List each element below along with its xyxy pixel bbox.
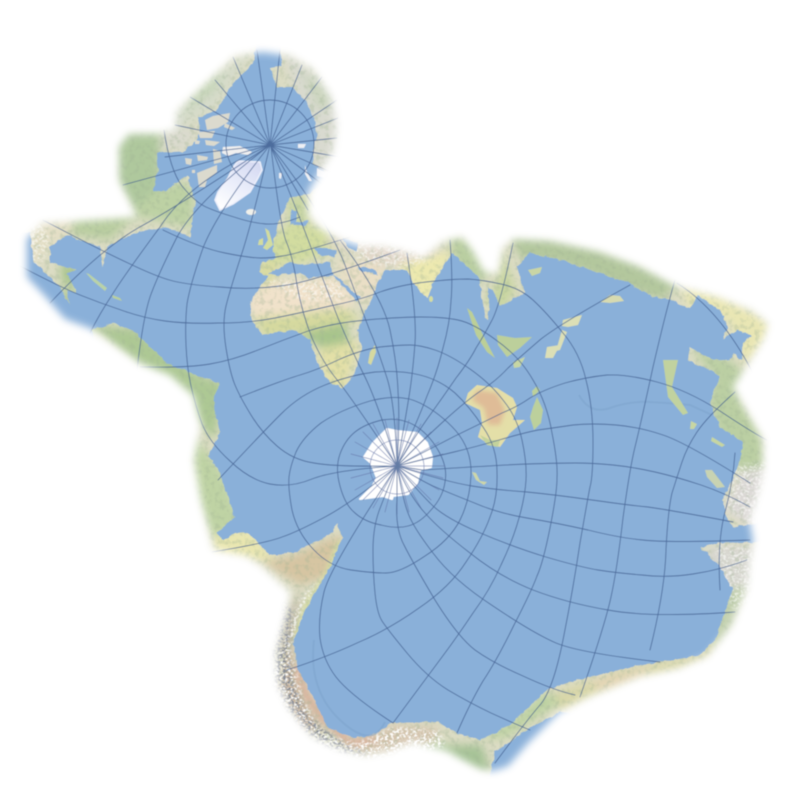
canadian arctic islands <box>185 113 235 187</box>
antarctica <box>360 429 432 499</box>
caribbean islands <box>86 273 107 291</box>
coastal colour bands along the southern mountains <box>297 545 372 743</box>
iceland <box>246 209 256 215</box>
mountain shadow speckle <box>273 606 366 756</box>
pacific beyond central america <box>22 232 92 334</box>
ellesmere and nearby ice-covered islands <box>222 146 252 156</box>
sulawesi <box>513 357 525 368</box>
borneo <box>497 335 532 357</box>
arctic islands east <box>279 144 327 181</box>
british isles <box>258 228 273 250</box>
greenland <box>215 161 262 210</box>
new guinea strip <box>530 397 543 430</box>
madagascar <box>368 345 376 365</box>
new zealand like island <box>472 472 487 485</box>
south pole rings <box>289 397 471 573</box>
sri lanka <box>429 296 433 302</box>
mountain snow speckle <box>276 583 446 758</box>
faint sea floor relief <box>366 728 382 737</box>
islands <box>86 113 725 499</box>
australia <box>465 385 525 447</box>
philippine group <box>545 315 582 358</box>
inland seas <box>268 262 333 278</box>
pale arid speckle <box>32 226 764 609</box>
eastern island chain <box>663 360 688 415</box>
sumatra <box>467 308 495 358</box>
parallels <box>18 130 753 763</box>
meridians from the south pole curving east <box>212 243 767 730</box>
south pole spokes <box>349 418 445 514</box>
north pole ring and spokes <box>123 50 342 210</box>
sea beyond the southern isthmus <box>490 712 565 775</box>
small islands north-east <box>600 295 624 303</box>
meridians from the north pole towards the south pole <box>50 145 452 485</box>
